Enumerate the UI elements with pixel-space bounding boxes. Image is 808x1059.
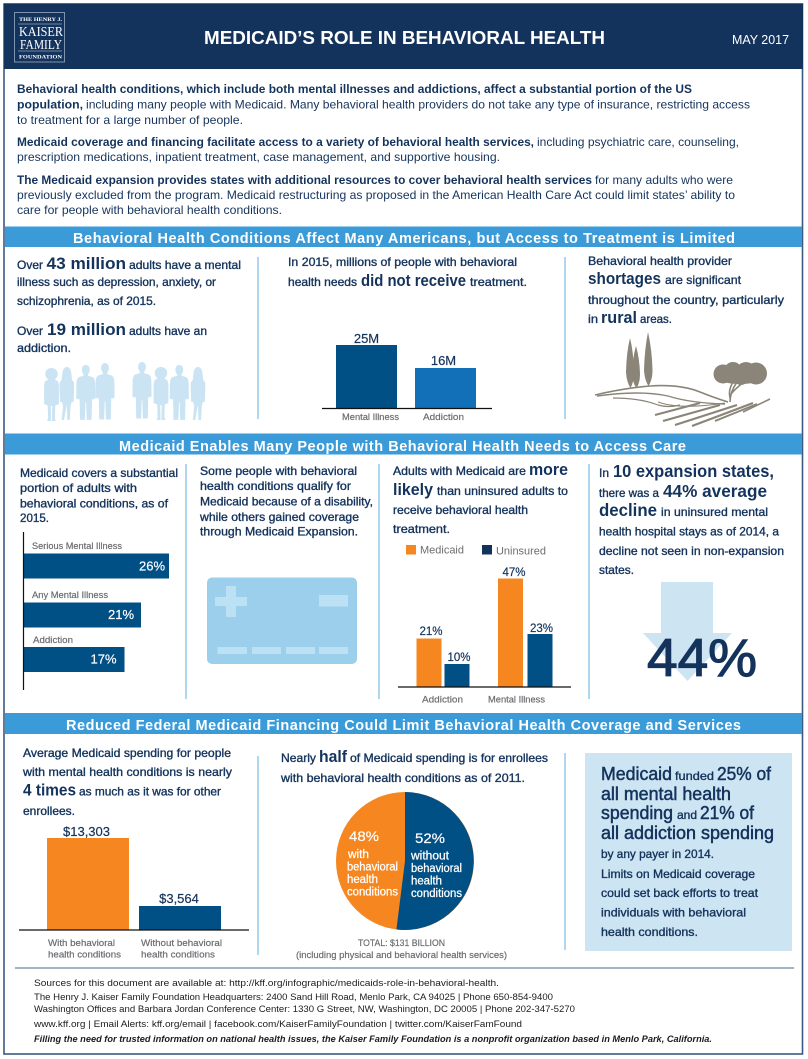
- section heading: financing: Reduced Federal Medicaid Financing Could Limit Behavioral Health Coverage and Services: [66, 718, 741, 734]
- text: spending per enrollee: with mental health conditions is nearly: [22, 765, 232, 779]
- callout: share of mental health and addiction spending: funded: [675, 769, 714, 783]
- header banner: [4, 4, 803, 69]
- bar chart: did not receive treatment: 25M: [354, 331, 379, 346]
- text: provider shortages: throughout the country, particularly: [588, 293, 784, 307]
- section heading: access to care: Medicaid Enables Many People with Behavioral Health Needs to Access Care: [119, 439, 686, 455]
- bar chart: spending per enrollee: health conditions: [48, 950, 121, 960]
- logo: Kaiser Family Foundation: [14, 12, 64, 62]
- section heading: access to care: [5, 434, 802, 455]
- panel: spending per enrollee: [19, 746, 249, 960]
- intro text block: Behavioral health conditions, which include both mental illnesses and addictions, affect a substantial portion of the US: [17, 83, 692, 96]
- text: coverage share: 2015.: [20, 511, 49, 525]
- pie chart: 48%: [349, 828, 379, 844]
- text: spending per enrollee: as much as it was for other: [79, 784, 221, 798]
- panel: Medicaid coverage share: [20, 466, 178, 690]
- bar chart: spending per enrollee: [19, 824, 249, 960]
- text: coverage share: Medicaid covers a substantial: [20, 466, 178, 480]
- intro text block: The Medicaid expansion provides states with additional resources to cover behavioral health services: [17, 174, 592, 187]
- icon: group of people silhouettes: [44, 362, 205, 421]
- legend: Medicaid: [420, 544, 464, 556]
- text: expansion states: [599, 461, 784, 577]
- text: expansion states: 44% average: [663, 481, 767, 501]
- intro text block: including many people with Medicaid. Many behavioral health providers do not take any type of insurance, restricting access: [86, 98, 750, 112]
- text: expansion states: In: [599, 466, 609, 480]
- text: 43 million and 19 million: illness such as depression, anxiety, or: [17, 275, 216, 289]
- text: expansion states: 10 expansion states,: [613, 461, 774, 481]
- text: spending per enrollee: [22, 746, 232, 818]
- footer: sources and contact: [33, 978, 712, 1045]
- text: spending per enrollee: 4 times: [23, 782, 76, 800]
- text: share of spending: [280, 748, 548, 785]
- text: treatment likelihood: receive behavioral health: [393, 503, 528, 517]
- text: provider shortages: in: [588, 312, 598, 326]
- text: treatment likelihood: than uninsured adults to: [437, 484, 568, 498]
- bar chart: coverage share: 26%: [139, 558, 165, 574]
- bar chart: Medicaid vs uninsured: 21%: [419, 626, 443, 638]
- text: eligibility: health conditions qualify for: [200, 479, 351, 493]
- bar chart: did not receive treatment: Addiction: [423, 412, 464, 423]
- section heading: access to treatment: Behavioral Health Conditions Affect Many Americans, but Access to Treatment is Limited: [73, 231, 735, 247]
- bar chart: spending per enrollee: With behavioral: [48, 938, 115, 949]
- text: 43 million and 19 million: Over: [17, 324, 43, 338]
- pie chart: health: [411, 876, 442, 888]
- logo: Kaiser Family Foundation: THE HENRY J.: [19, 17, 63, 23]
- panel: did not receive treatment: [288, 255, 527, 423]
- pie total caption: TOTAL: $131 BILLION: [358, 938, 445, 949]
- callout: share of mental health and addiction spending: 21% of: [700, 803, 755, 823]
- intro text block: previously excluded from the program. Medicaid restructuring as proposed in the American Health Care Act could limit states’ ability to: [17, 189, 735, 202]
- panel: prevalence: [17, 255, 241, 421]
- text: expansion states: in uninsured mental: [661, 505, 768, 519]
- text: provider shortages: Behavioral health provider: [588, 254, 732, 268]
- pie total caption: [296, 938, 507, 961]
- callout: share of mental health and addiction spending: [585, 753, 792, 951]
- callout: share of mental health and addiction spending: individuals with behavioral: [601, 906, 746, 920]
- pie chart: health: [347, 874, 378, 886]
- intro text block: to treatment for a large number of people.: [17, 114, 243, 127]
- title: MEDICAID’S ROLE IN BEHAVIORAL HEALTH: [204, 27, 605, 48]
- intro text block: including psychiatric care, counseling,: [537, 136, 739, 149]
- callout: share of mental health and addiction spending: by any payer in 2014.: [601, 847, 714, 861]
- text: did not receive treatment: did not receive: [361, 272, 466, 290]
- text: did not receive treatment: In 2015, millions of people with behavioral: [288, 255, 517, 269]
- text: share of spending: Nearly: [281, 751, 316, 765]
- text: coverage share: behavioral conditions, as of: [20, 496, 169, 510]
- bar chart: coverage share: Addiction: [33, 635, 73, 646]
- panel: expansion states: [599, 461, 784, 688]
- bar chart: coverage share: Any Mental Illness: [32, 590, 108, 601]
- callout: share of mental health and addiction spending: all mental health: [601, 784, 731, 804]
- text: 43 million and 19 million: 19 million: [47, 321, 126, 339]
- section heading: financing: [5, 713, 802, 734]
- text: coverage share: portion of adults with: [20, 481, 137, 495]
- text: share of spending: half: [319, 748, 347, 766]
- callout: share of mental health and addiction spending: health conditions.: [601, 925, 698, 939]
- intro text block: [17, 83, 750, 217]
- pie total caption: (including physical and behavioral health services): [296, 950, 507, 961]
- pie chart: with: [347, 849, 369, 861]
- callout: share of mental health and addiction spending: 25% of: [717, 764, 772, 784]
- text: eligibility: [199, 464, 373, 538]
- bar chart: spending per enrollee: $3,564: [159, 891, 199, 906]
- text: expansion states: states.: [599, 563, 634, 577]
- bar chart: coverage share: Serious Mental Illness: [32, 541, 122, 552]
- text: provider shortages: are significant: [665, 273, 742, 287]
- legend: Uninsured: [496, 546, 546, 558]
- logo: Kaiser Family Foundation: FAMILY: [20, 38, 62, 53]
- text: treatment likelihood: [393, 461, 568, 536]
- footer: sources and contact: Filling the need for trusted information on national health issues, the Kaiser Family Foundation is a nonprofit organization based in Menlo Park, California.: [34, 1034, 712, 1045]
- text: provider shortages: areas.: [640, 312, 672, 326]
- text: 43 million and 19 million: schizophrenia, as of 2015.: [17, 294, 156, 308]
- text: treatment likelihood: treatment.: [393, 522, 450, 536]
- text: expansion states: decline not seen in non-expansion: [599, 544, 784, 558]
- pie chart: [336, 792, 474, 930]
- text: expansion states: health hospital stays as of 2014, a: [599, 524, 779, 538]
- pie chart: behavioral: [347, 862, 398, 874]
- icon: insurance card: [207, 578, 357, 664]
- bar chart: Medicaid vs uninsured: [398, 567, 571, 706]
- footer: sources and contact: Sources for this document are available at: http://kff.org/infographic/medicaids-role-in-behavioral-health.: [34, 978, 499, 989]
- legend: [406, 544, 546, 558]
- pie chart: conditions: [347, 886, 398, 898]
- bar chart: did not receive treatment: [322, 331, 492, 423]
- text: 43 million and 19 million: addiction.: [17, 341, 71, 355]
- pie chart: conditions: [411, 888, 462, 900]
- text: treatment likelihood: Adults with Medicaid are: [393, 464, 526, 478]
- date: MAY 2017: [732, 33, 789, 47]
- callout: share of mental health and addiction spending: all addiction spending: [601, 823, 774, 843]
- bar chart: did not receive treatment: 16M: [431, 353, 456, 368]
- arrow: decline: [643, 582, 732, 681]
- big number: 44%: 44%: [647, 629, 757, 688]
- bar chart: Medicaid vs uninsured: Addiction: [422, 694, 463, 706]
- text: expansion states: decline: [599, 500, 657, 520]
- intro text block: population,: [17, 98, 83, 112]
- text: provider shortages: shortages: [588, 270, 661, 288]
- bar chart: Medicaid vs uninsured: 47%: [502, 567, 526, 579]
- text: did not receive treatment: treatment.: [470, 275, 527, 289]
- text: share of spending: of Medicaid spending is for enrollees: [350, 751, 548, 765]
- pie chart: behavioral: [411, 863, 462, 875]
- logo: Kaiser Family Foundation: FOUNDATION: [19, 54, 62, 60]
- pie chart: 52%: [415, 830, 445, 846]
- bar chart: coverage share: 21%: [108, 607, 134, 622]
- intro text block: Medicaid coverage and financing facilitate access to a variety of behavioral health services,: [17, 136, 534, 149]
- footer: sources and contact: Washington Offices and Barbara Jordan Conference Center: 1330 G Street, NW, Washington, DC 20005 | Phone 202-347-5270: [34, 1004, 575, 1015]
- text: 43 million and 19 million: Over: [17, 258, 43, 272]
- section heading: access to treatment: [5, 226, 802, 247]
- callout: share of mental health and addiction spending: Limits on Medicaid coverage: [601, 867, 755, 881]
- intro text block: for many adults who were: [595, 174, 733, 187]
- icon: rural landscape: [595, 332, 770, 426]
- bar chart: Medicaid vs uninsured: 23%: [530, 623, 553, 635]
- panel: provider shortages: [588, 254, 784, 426]
- panel: share of Medicaid spending: [280, 748, 548, 961]
- text: did not receive treatment: health needs: [288, 275, 357, 289]
- panel: eligibility: [199, 464, 373, 664]
- text: eligibility: through Medicaid Expansion.: [200, 524, 358, 538]
- text: 43 million and 19 million: [17, 255, 241, 355]
- text: eligibility: Some people with behavioral: [200, 464, 357, 478]
- bar chart: Medicaid vs uninsured: Mental Illness: [488, 694, 545, 706]
- callout: share of mental health and addiction spending: and: [677, 808, 697, 822]
- pie chart: without: [410, 850, 450, 862]
- bar chart: Medicaid vs uninsured: 10%: [447, 652, 471, 664]
- text: 43 million and 19 million: 43 million: [46, 255, 126, 273]
- text: eligibility: Medicaid because of a disability,: [200, 494, 373, 508]
- logo: Kaiser Family Foundation: KAISER: [19, 25, 64, 40]
- callout: share of mental health and addiction spending: Medicaid: [601, 764, 672, 784]
- text: treatment likelihood: likely: [393, 481, 434, 499]
- text: provider shortages: [588, 254, 784, 327]
- bar chart: spending per enrollee: Without behavioral: [141, 938, 222, 949]
- bar chart: coverage share: [24, 532, 169, 690]
- text: 43 million and 19 million: adults have a mental: [129, 258, 241, 272]
- text: eligibility: while others gained coverage: [199, 510, 359, 524]
- bar chart: spending per enrollee: $13,303: [63, 824, 110, 839]
- text: 43 million and 19 million: adults have an: [129, 324, 207, 338]
- intro text block: care for people with behavioral health conditions.: [17, 204, 282, 217]
- bar chart: spending per enrollee: health conditions: [141, 950, 215, 960]
- text: spending per enrollee: enrollees.: [23, 804, 75, 818]
- text: provider shortages: rural: [601, 309, 637, 327]
- bar chart: did not receive treatment: Mental Illness: [342, 412, 399, 423]
- text: spending per enrollee: Average Medicaid spending for people: [23, 746, 231, 760]
- callout: share of mental health and addiction spending: spending: [601, 803, 673, 823]
- text: coverage share: [20, 466, 178, 525]
- text: treatment likelihood: more: [529, 461, 568, 479]
- text: share of spending: with behavioral health conditions as of 2011.: [280, 771, 525, 785]
- footer: sources and contact: The Henry J. Kaiser Family Foundation Headquarters: 2400 Sand Hill Road, Menlo Park, CA 94025 | Phone 650-854-9400: [34, 992, 553, 1003]
- intro text block: prescription medications, inpatient treatment, case management, and supportive housing.: [17, 151, 500, 164]
- panel: treatment likelihood: [393, 461, 571, 706]
- bar chart: coverage share: 17%: [90, 652, 117, 666]
- text: expansion states: there was a: [599, 486, 659, 500]
- callout: share of mental health and addiction spending: could set back efforts to treat: [601, 886, 759, 900]
- text: did not receive treatment: [288, 255, 527, 290]
- footer: sources and contact: www.kff.org | Email Alerts: kff.org/email | facebook.com/KaiserFamilyFoundation | twitter.com/KaiserFamFound: [33, 1019, 522, 1030]
